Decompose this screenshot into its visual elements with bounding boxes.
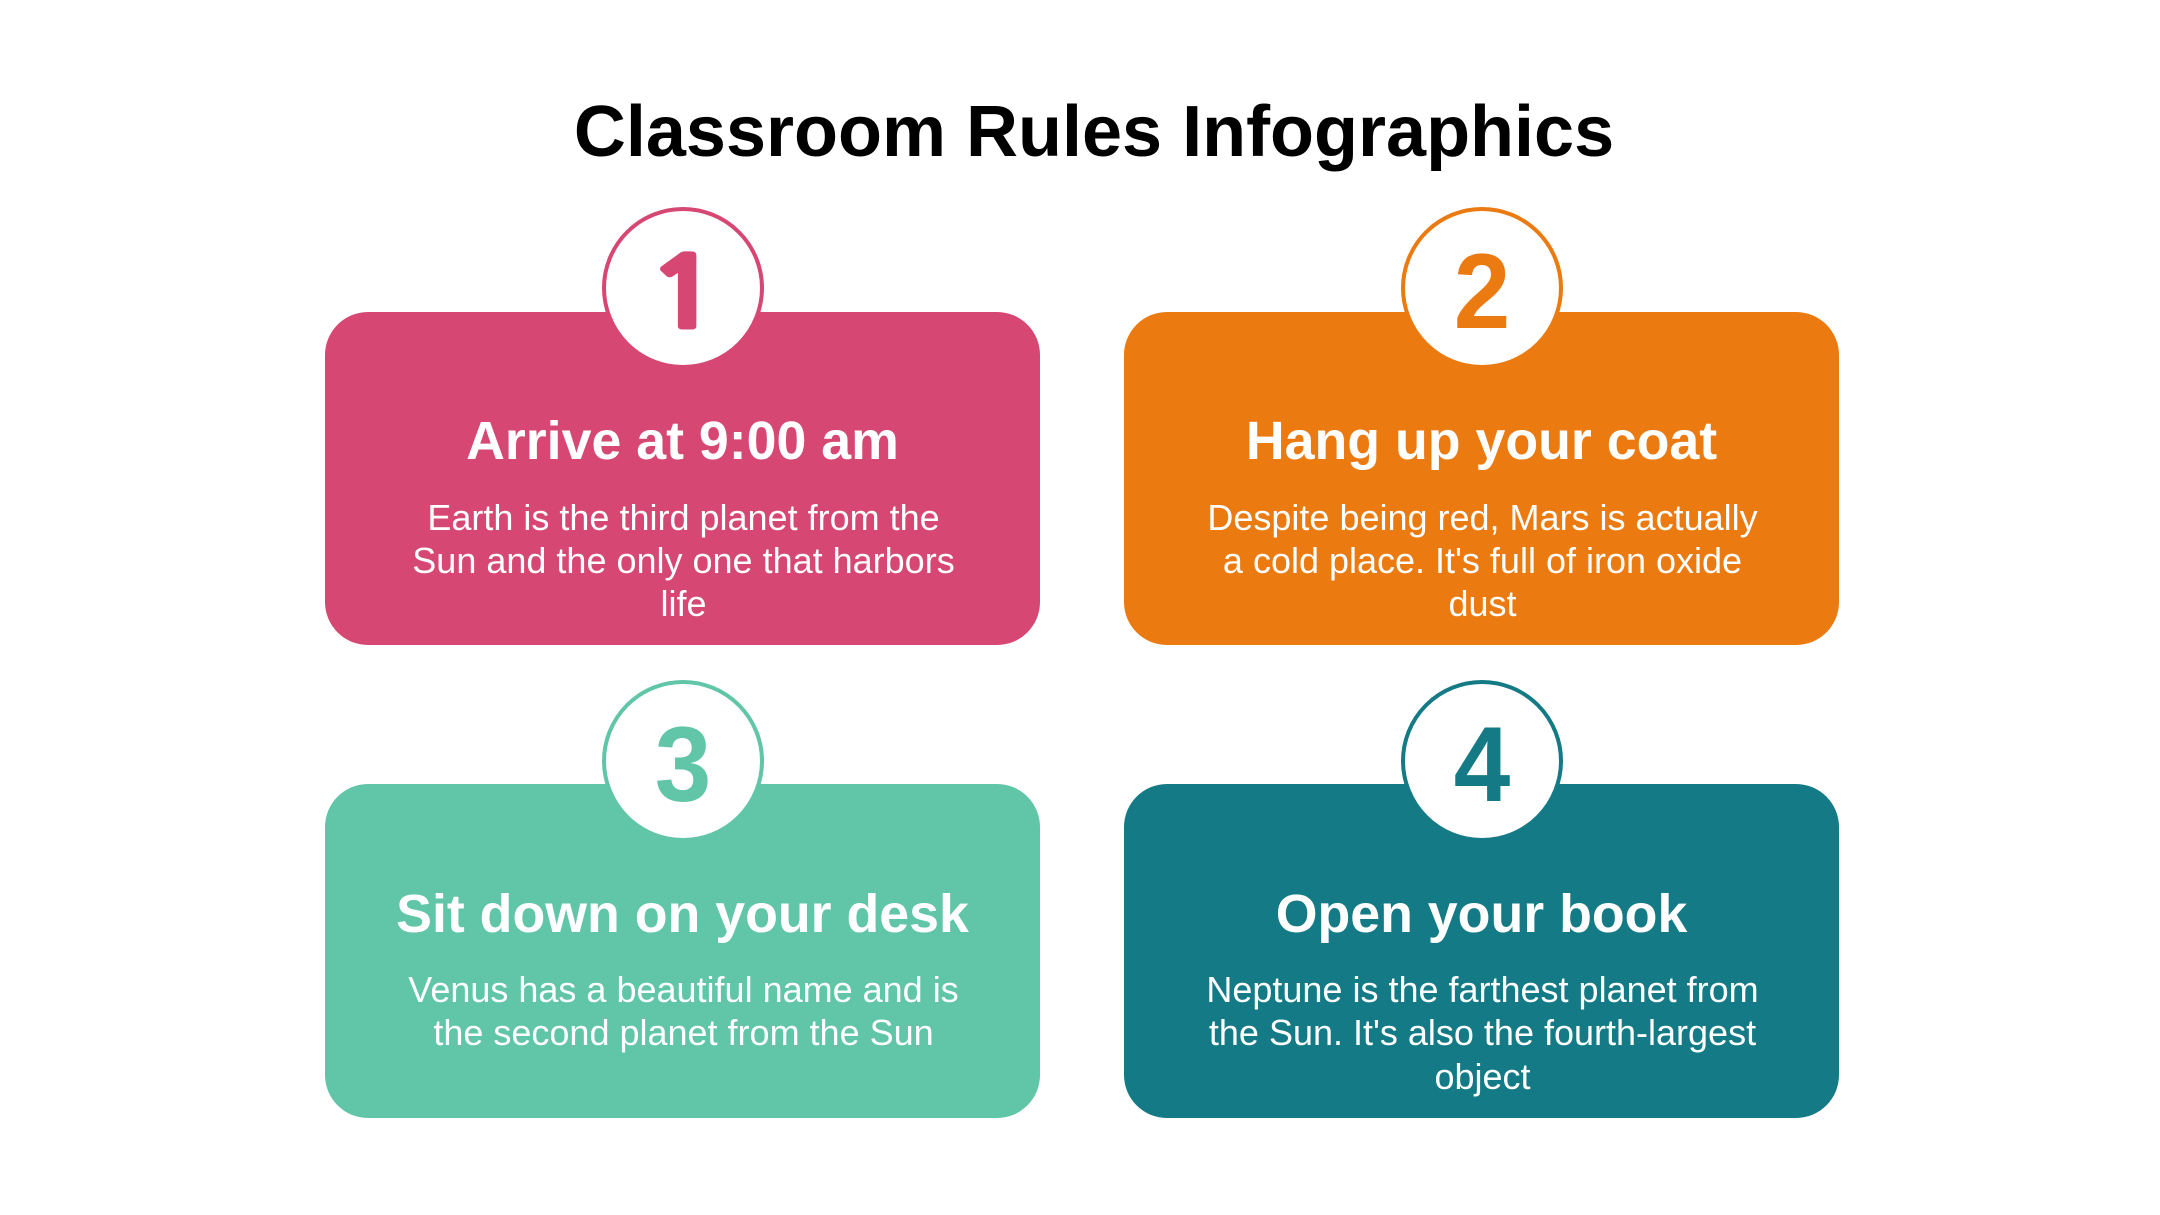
panel: rule 1: [325, 207, 1040, 645]
number badge 4: [1400, 680, 1562, 842]
panel: rule 4: [1124, 680, 1839, 1118]
number badge 1: 1: [646, 246, 721, 342]
panel: rule 2: [1124, 207, 1839, 645]
card background 1: [325, 312, 1040, 645]
card background 4: [1124, 784, 1839, 1118]
text: rule 4 description: object: [1434, 1056, 1531, 1097]
text: rule 3 description: [408, 969, 959, 1053]
text: rule 1 description: [412, 496, 955, 624]
heading: rule 2: Hang up your coat: [1246, 411, 1717, 471]
text: rule 2 description: a cold place. It's full of iron oxide: [1223, 540, 1742, 581]
text: rule 1 description: life: [660, 583, 707, 624]
card background 2: [1124, 312, 1839, 645]
number badge 1: [602, 207, 764, 369]
heading: rule 1: Arrive at 9:00 am: [466, 411, 899, 471]
text: rule 1 description: Earth is the third planet from the: [427, 496, 940, 538]
number badge 2: [1400, 207, 1562, 369]
text: rule 2 description: [1207, 496, 1758, 624]
text: rule 4 description: Neptune is the farthest planet from: [1206, 969, 1759, 1010]
number badge 2: 2: [1453, 231, 1510, 351]
number badge 4: 4: [1453, 704, 1510, 824]
text: rule 3 description: the second planet from the Sun: [433, 1012, 934, 1053]
text: rule 2 description: dust: [1448, 583, 1517, 624]
text: rule 4 description: the Sun. It's also the fourth-largest: [1209, 1012, 1756, 1053]
text: rule 1 description: Sun and the only one that harbors: [412, 540, 955, 581]
heading: rule 4: Open your book: [1276, 884, 1687, 944]
heading: rule 3: Sit down on your desk: [396, 884, 969, 944]
card background 3: [325, 784, 1040, 1118]
number badge 3: 3: [654, 704, 711, 824]
panel: rule 3: [325, 680, 1040, 1118]
text: rule 3 description: Venus has a beautiful name and is: [408, 969, 959, 1010]
text: rule 2 description: Despite being red, Mars is actually: [1207, 496, 1758, 538]
text: rule 4 description: [1206, 969, 1759, 1097]
number badge 3: [602, 680, 764, 842]
title: Classroom Rules Infographics: [574, 92, 1614, 172]
